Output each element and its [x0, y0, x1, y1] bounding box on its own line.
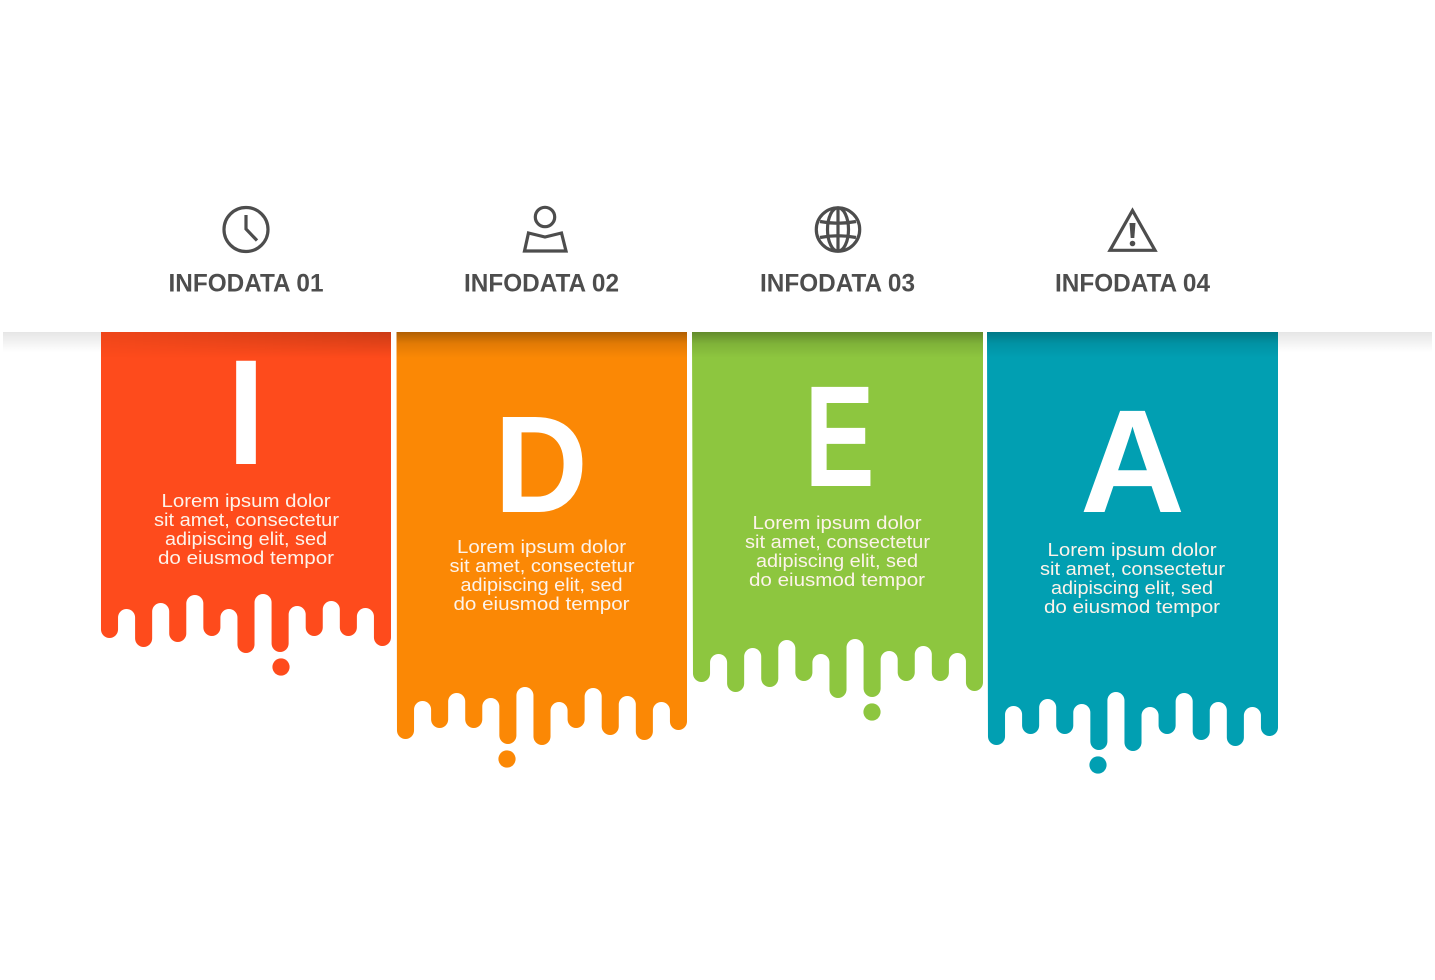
body text [1040, 540, 1225, 617]
body text [745, 513, 930, 590]
top shadow on teal ribbon [987, 332, 1278, 358]
drop [272, 658, 290, 676]
letter D: D [494, 388, 588, 542]
panel: letter D [396, 332, 687, 768]
orange ribbon with drips [396, 332, 687, 745]
heading: INFODATA 02: INFODATA 02 [464, 270, 619, 298]
green ribbon with drips [692, 332, 983, 698]
heading: INFODATA 03: INFODATA 03 [760, 270, 915, 298]
drop [498, 750, 516, 768]
icon: person on map [524, 207, 566, 251]
icon: globe [816, 208, 860, 251]
panel: letter E [692, 332, 983, 721]
top shadow on orange ribbon [396, 332, 687, 358]
body text: do eiusmod tempor [454, 594, 630, 614]
letter E: E [804, 356, 875, 517]
body text: Lorem ipsum dolor [752, 513, 922, 533]
body text: do eiusmod tempor [1044, 597, 1220, 617]
body text: sit amet, consectetur [450, 556, 634, 576]
teal ribbon with drips [987, 332, 1278, 751]
body text [154, 491, 339, 568]
body text: do eiusmod tempor [158, 548, 334, 568]
body text: sit amet, consectetur [745, 532, 930, 552]
body text [450, 537, 634, 614]
icon: clock [224, 208, 268, 252]
body text: sit amet, consectetur [154, 510, 339, 530]
body text: Lorem ipsum dolor [1048, 540, 1217, 560]
heading: INFODATA 01: INFODATA 01 [168, 270, 324, 298]
body text: Lorem ipsum dolor [457, 537, 626, 557]
body text: adipiscing elit, sed [460, 575, 622, 595]
body text: Lorem ipsum dolor [162, 491, 331, 511]
drop [863, 703, 881, 721]
shadow band right [1278, 332, 1432, 352]
drop [1089, 756, 1107, 774]
shadow band left [3, 332, 101, 352]
panel: letter A [987, 332, 1278, 774]
letter A: A [1080, 379, 1185, 543]
top shadow on red ribbon [101, 332, 391, 354]
heading: INFODATA 04: INFODATA 04 [1055, 270, 1210, 298]
body text: do eiusmod tempor [749, 570, 925, 590]
body text: adipiscing elit, sed [165, 529, 327, 549]
red ribbon with drips [101, 332, 391, 653]
panel: letter I [101, 329, 391, 676]
letter I: I [227, 329, 265, 496]
body text: adipiscing elit, sed [1051, 578, 1213, 598]
icon: warning triangle [1110, 210, 1155, 250]
body text: adipiscing elit, sed [756, 551, 918, 571]
body text: sit amet, consectetur [1040, 559, 1225, 579]
top shadow on green ribbon [692, 332, 983, 358]
